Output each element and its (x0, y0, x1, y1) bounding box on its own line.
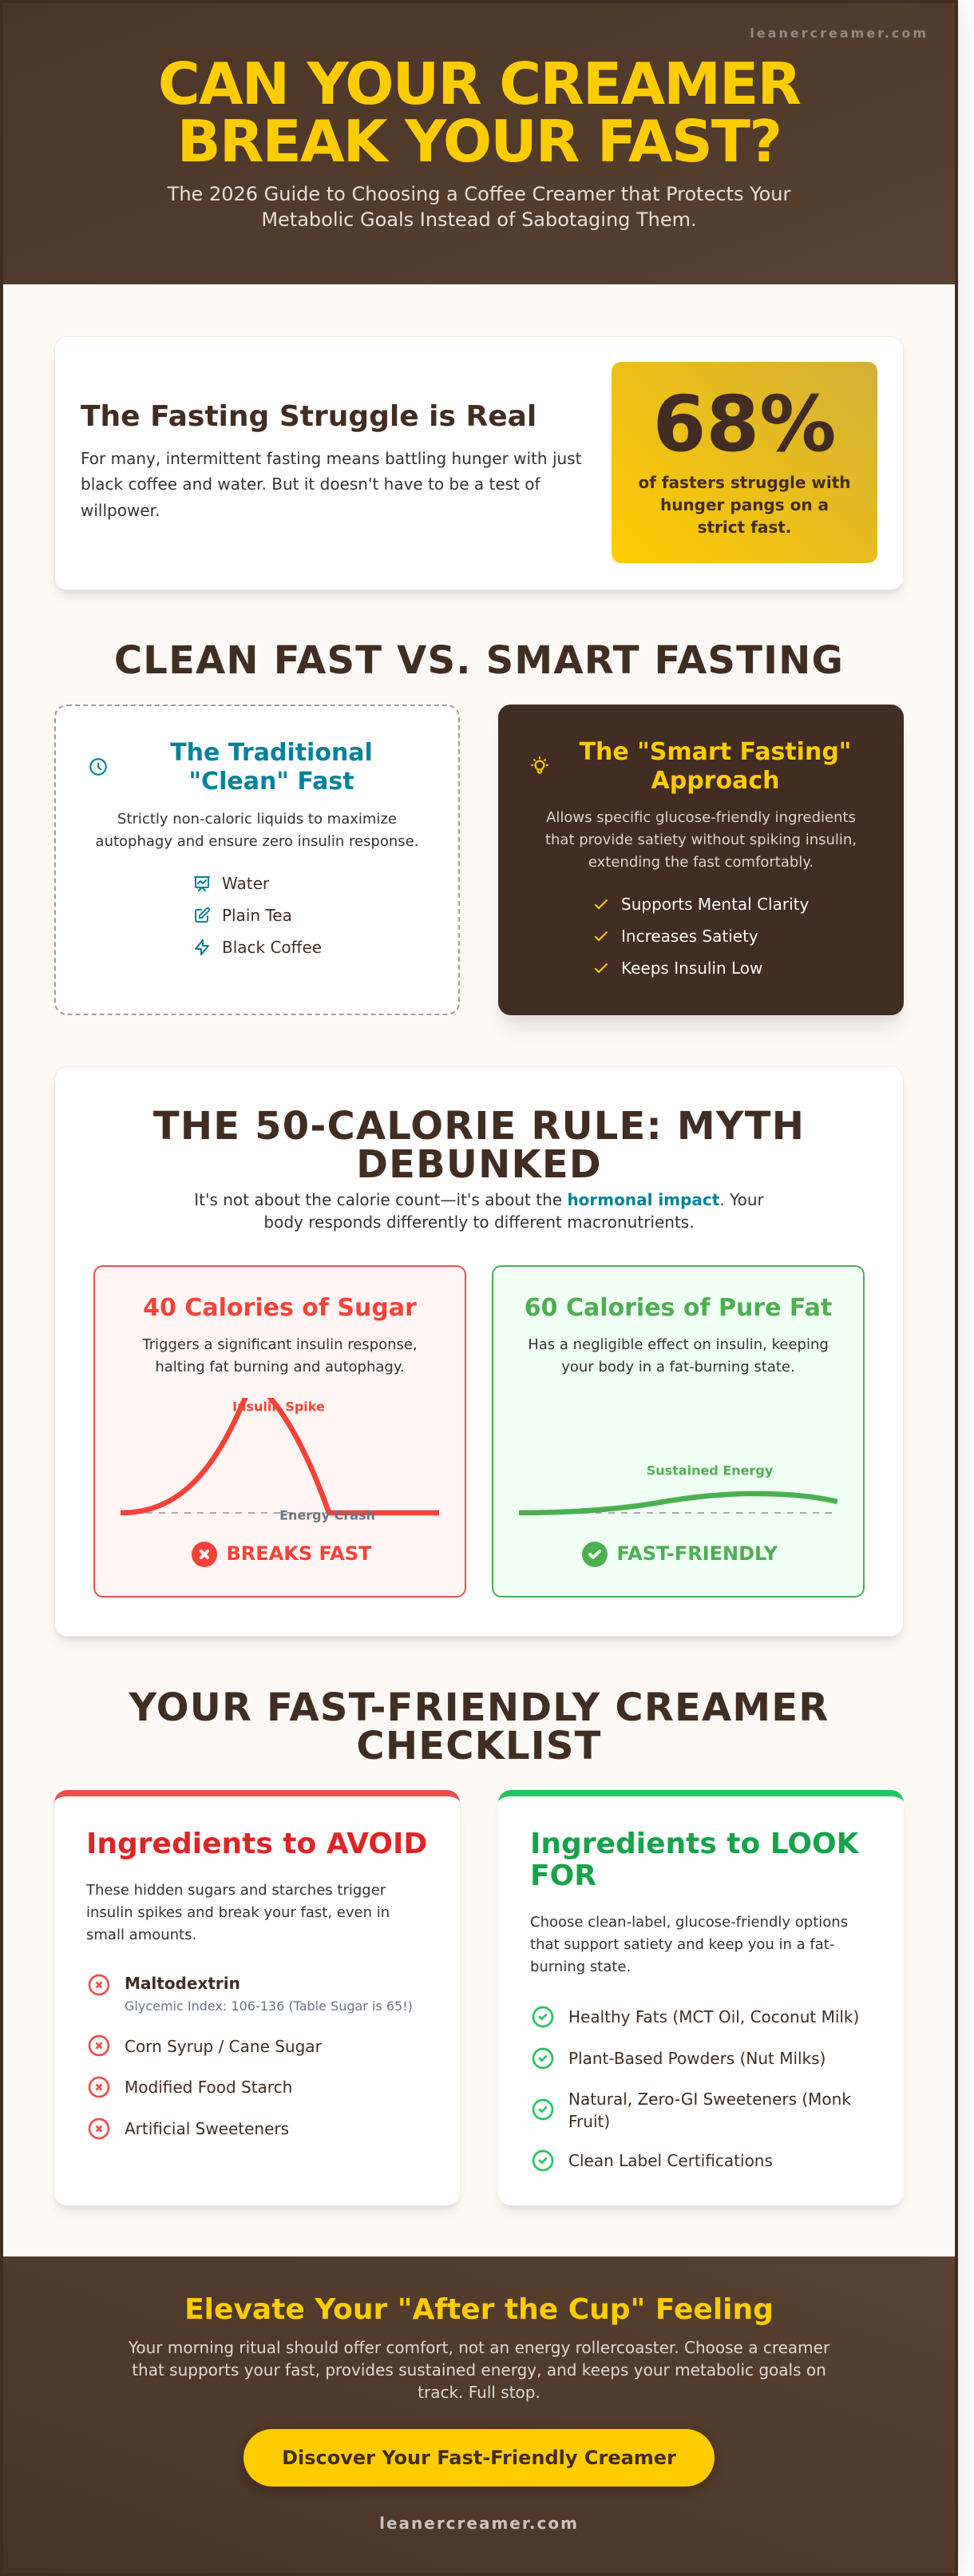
heading: smart fasting (580, 738, 851, 795)
footer heading: Elevate Your "After the Cup" Feeling (184, 2293, 774, 2326)
header band (0, 0, 958, 284)
item: corn syrup: Corn Syrup / Cane Sugar (125, 2037, 322, 2056)
item: starch: Modified Food Starch (125, 2078, 292, 2097)
stat caption (638, 473, 851, 537)
text: look for: burning state. (530, 1959, 631, 1975)
text: sugar (142, 1336, 418, 1375)
stat number: 68% (653, 379, 836, 469)
text: hormonal impact (194, 1190, 764, 1232)
heading: smart fasting: The "Smart Fasting" (580, 738, 851, 766)
list: clean fast liquids (194, 874, 322, 957)
icon: fast friendly (582, 1542, 608, 1567)
panel: traditional clean fast (54, 705, 460, 1015)
text: smart fasting: Allows specific glucose-friendly ingredients (546, 809, 856, 826)
item: natural sweeteners: Fruit) (568, 2112, 610, 2131)
icon: check three (595, 963, 608, 973)
icon: x corn syrup (88, 2035, 110, 2056)
call to action button (244, 2429, 715, 2487)
verdict: fast friendly: FAST-FRIENDLY (616, 1542, 778, 1565)
chart: insulin spike (121, 1398, 439, 1523)
footer text: Your morning ritual should offer comfort, not an energy rollercoaster. Choose a creamer (129, 2338, 829, 2357)
heading: 50-calorie rule: THE 50-CALORIE RULE: MYTH (153, 1104, 805, 1149)
text: fasting struggle: willpower. (81, 501, 160, 520)
panel: ingredients to look for (498, 1790, 904, 2205)
subtitle: Metabolic Goals Instead of Sabotaging Them. (261, 208, 697, 231)
item: mental clarity: Supports Mental Clarity (621, 895, 809, 914)
item: natural sweeteners (568, 2090, 851, 2131)
panel: 60 calories of pure fat (492, 1265, 865, 1598)
text: fat: Has a negligible effect on insulin, keeping (528, 1336, 829, 1353)
main title (158, 50, 800, 175)
heading: 50-calorie rule (153, 1104, 805, 1187)
text: look for: Choose clean-label, glucose-friendly options (530, 1914, 848, 1930)
panel: fasting struggle (54, 336, 904, 590)
chart: sustained energy (519, 1463, 837, 1516)
icon: check certifications (532, 2150, 554, 2171)
verdict: breaks fast: BREAKS FAST (227, 1542, 371, 1565)
heading: traditional: "Clean" Fast (188, 768, 354, 796)
subtitle (168, 183, 790, 231)
item: powders: Plant-Based Powders (Nut Milks) (568, 2049, 826, 2068)
text: smart fasting (545, 809, 857, 871)
item: coffee: Black Coffee (222, 938, 322, 957)
icon: water (194, 876, 210, 891)
heading: clean fast vs smart fasting: CLEAN FAST VS. SMART FASTING (114, 638, 844, 683)
call to action button: Discover Your Fast-Friendly Creamer (282, 2447, 676, 2469)
text: traditional: Strictly non-caloric liquids to maximize (117, 811, 397, 828)
heading: fasting struggle: The Fasting Struggle is Real (81, 400, 536, 433)
icon: tea (195, 907, 210, 923)
stat caption: of fasters struggle with (638, 473, 851, 492)
subtitle: The 2026 Guide to Choosing a Coffee Creamer that Protects Your (168, 183, 790, 205)
main title: BREAK YOUR FAST? (177, 108, 781, 175)
text: fasting struggle: black coffee and water. But it doesn't have to be a test of (81, 474, 540, 494)
site label: leanercreamer.com (750, 26, 928, 41)
text: fat (528, 1336, 829, 1375)
note: glycemic index: Glycemic Index: 106-136 (Table Sugar is 65!) (125, 1998, 413, 2014)
list: smart fasting benefits (595, 895, 809, 978)
text: fasting struggle (81, 449, 581, 520)
text: look for (530, 1914, 848, 1975)
heading: traditional (170, 739, 373, 796)
heading: smart fasting: Approach (651, 767, 779, 795)
main title: CAN YOUR CREAMER (158, 50, 800, 117)
heading: look for: Ingredients to LOOK (530, 1828, 859, 1860)
footer text: that supports your fast, provides sustained energy, and keeps your metabolic goals on (132, 2360, 826, 2380)
icon: x maltodextrin (88, 1975, 110, 1995)
text: traditional: autophagy and ensure zero insulin response. (96, 833, 418, 850)
icon: x starch (88, 2077, 110, 2098)
item: fats: Healthy Fats (MCT Oil, Coconut Milk) (568, 2007, 859, 2026)
panel: ingredients to avoid (54, 1790, 460, 2205)
item: sweeteners: Artificial Sweeteners (125, 2119, 289, 2138)
text: smart fasting: that provide satiety without spiking insulin, (545, 832, 857, 848)
item: satiety: Increases Satiety (621, 927, 758, 946)
icon: check powders (532, 2048, 554, 2069)
text: hormonal impact: It's not about the calorie count—it's about the hormonal impact. Your (194, 1190, 764, 1209)
icon: check one (595, 899, 608, 909)
text: fat: your body in a fat-burning state. (561, 1359, 795, 1375)
panel: 40 calories of sugar (93, 1265, 466, 1598)
text: avoid: These hidden sugars and starches trigger (86, 1882, 386, 1899)
icon: check sweeteners (532, 2099, 554, 2120)
icon: check two (595, 931, 608, 941)
heading: sugar: 40 Calories of Sugar (143, 1294, 417, 1321)
panel: smart fasting (498, 705, 904, 1015)
text: smart fasting: extending the fast comfortably. (588, 854, 814, 871)
footer text (128, 2338, 830, 2402)
text: avoid: small amounts. (86, 1927, 196, 1943)
panel: 50-calorie rule (54, 1066, 904, 1637)
item: natural sweeteners: Natural, Zero-GI Sweeteners (Monk (568, 2090, 851, 2109)
text: avoid: insulin spikes and break your fast, even in (86, 1904, 390, 1921)
icon: x sweeteners (88, 2118, 110, 2139)
chart: insulin spike: Energy Crash (279, 1508, 375, 1523)
item: insulin low: Keeps Insulin Low (621, 959, 762, 978)
icon: light bulb (531, 756, 548, 774)
footer brand: leanercreamer.com (379, 2514, 579, 2533)
heading: fat: 60 Calories of Pure Fat (525, 1294, 832, 1321)
heading: look for (530, 1828, 859, 1892)
icon: coffee (195, 939, 209, 955)
icon: breaks fast (192, 1542, 217, 1567)
heading: traditional: The Traditional (170, 739, 373, 767)
text: sugar: Triggers a significant insulin response, (142, 1336, 418, 1353)
heading: creamer checklist (129, 1685, 829, 1768)
item: tea: Plain Tea (222, 906, 292, 925)
icon: clock (89, 758, 107, 776)
item: water: Water (222, 874, 269, 893)
text: hormonal impact: body responds differently to different macronutrients. (263, 1213, 695, 1232)
heading: avoid: Ingredients to AVOID (86, 1828, 427, 1860)
text: look for: that support satiety and keep you in a fat- (530, 1936, 834, 1952)
stat caption: strict fast. (698, 518, 791, 537)
stat box: 68 percent (612, 362, 877, 563)
icon: check fats (532, 2006, 554, 2027)
text: avoid (86, 1882, 390, 1943)
text: fasting struggle: For many, intermittent fasting means battling hunger with just (81, 449, 581, 468)
stat caption: hunger pangs on a (660, 495, 829, 514)
heading: 50-calorie rule: DEBUNKED (356, 1142, 602, 1187)
item: certifications: Clean Label Certifications (568, 2151, 773, 2170)
chart: insulin spike: Insulin Spike (232, 1399, 325, 1415)
text: traditional (96, 811, 418, 850)
heading: creamer checklist: YOUR FAST-FRIENDLY CREAMER (129, 1685, 829, 1730)
heading: creamer checklist: CHECKLIST (356, 1724, 602, 1768)
footer text: track. Full stop. (418, 2383, 540, 2402)
chart: sustained energy: Sustained Energy (647, 1463, 774, 1479)
heading: look for: FOR (530, 1860, 596, 1892)
text: sugar: halting fat burning and autophagy. (155, 1359, 405, 1375)
footer band (0, 2256, 958, 2576)
item: maltodextrin: Maltodextrin (125, 1974, 240, 1993)
